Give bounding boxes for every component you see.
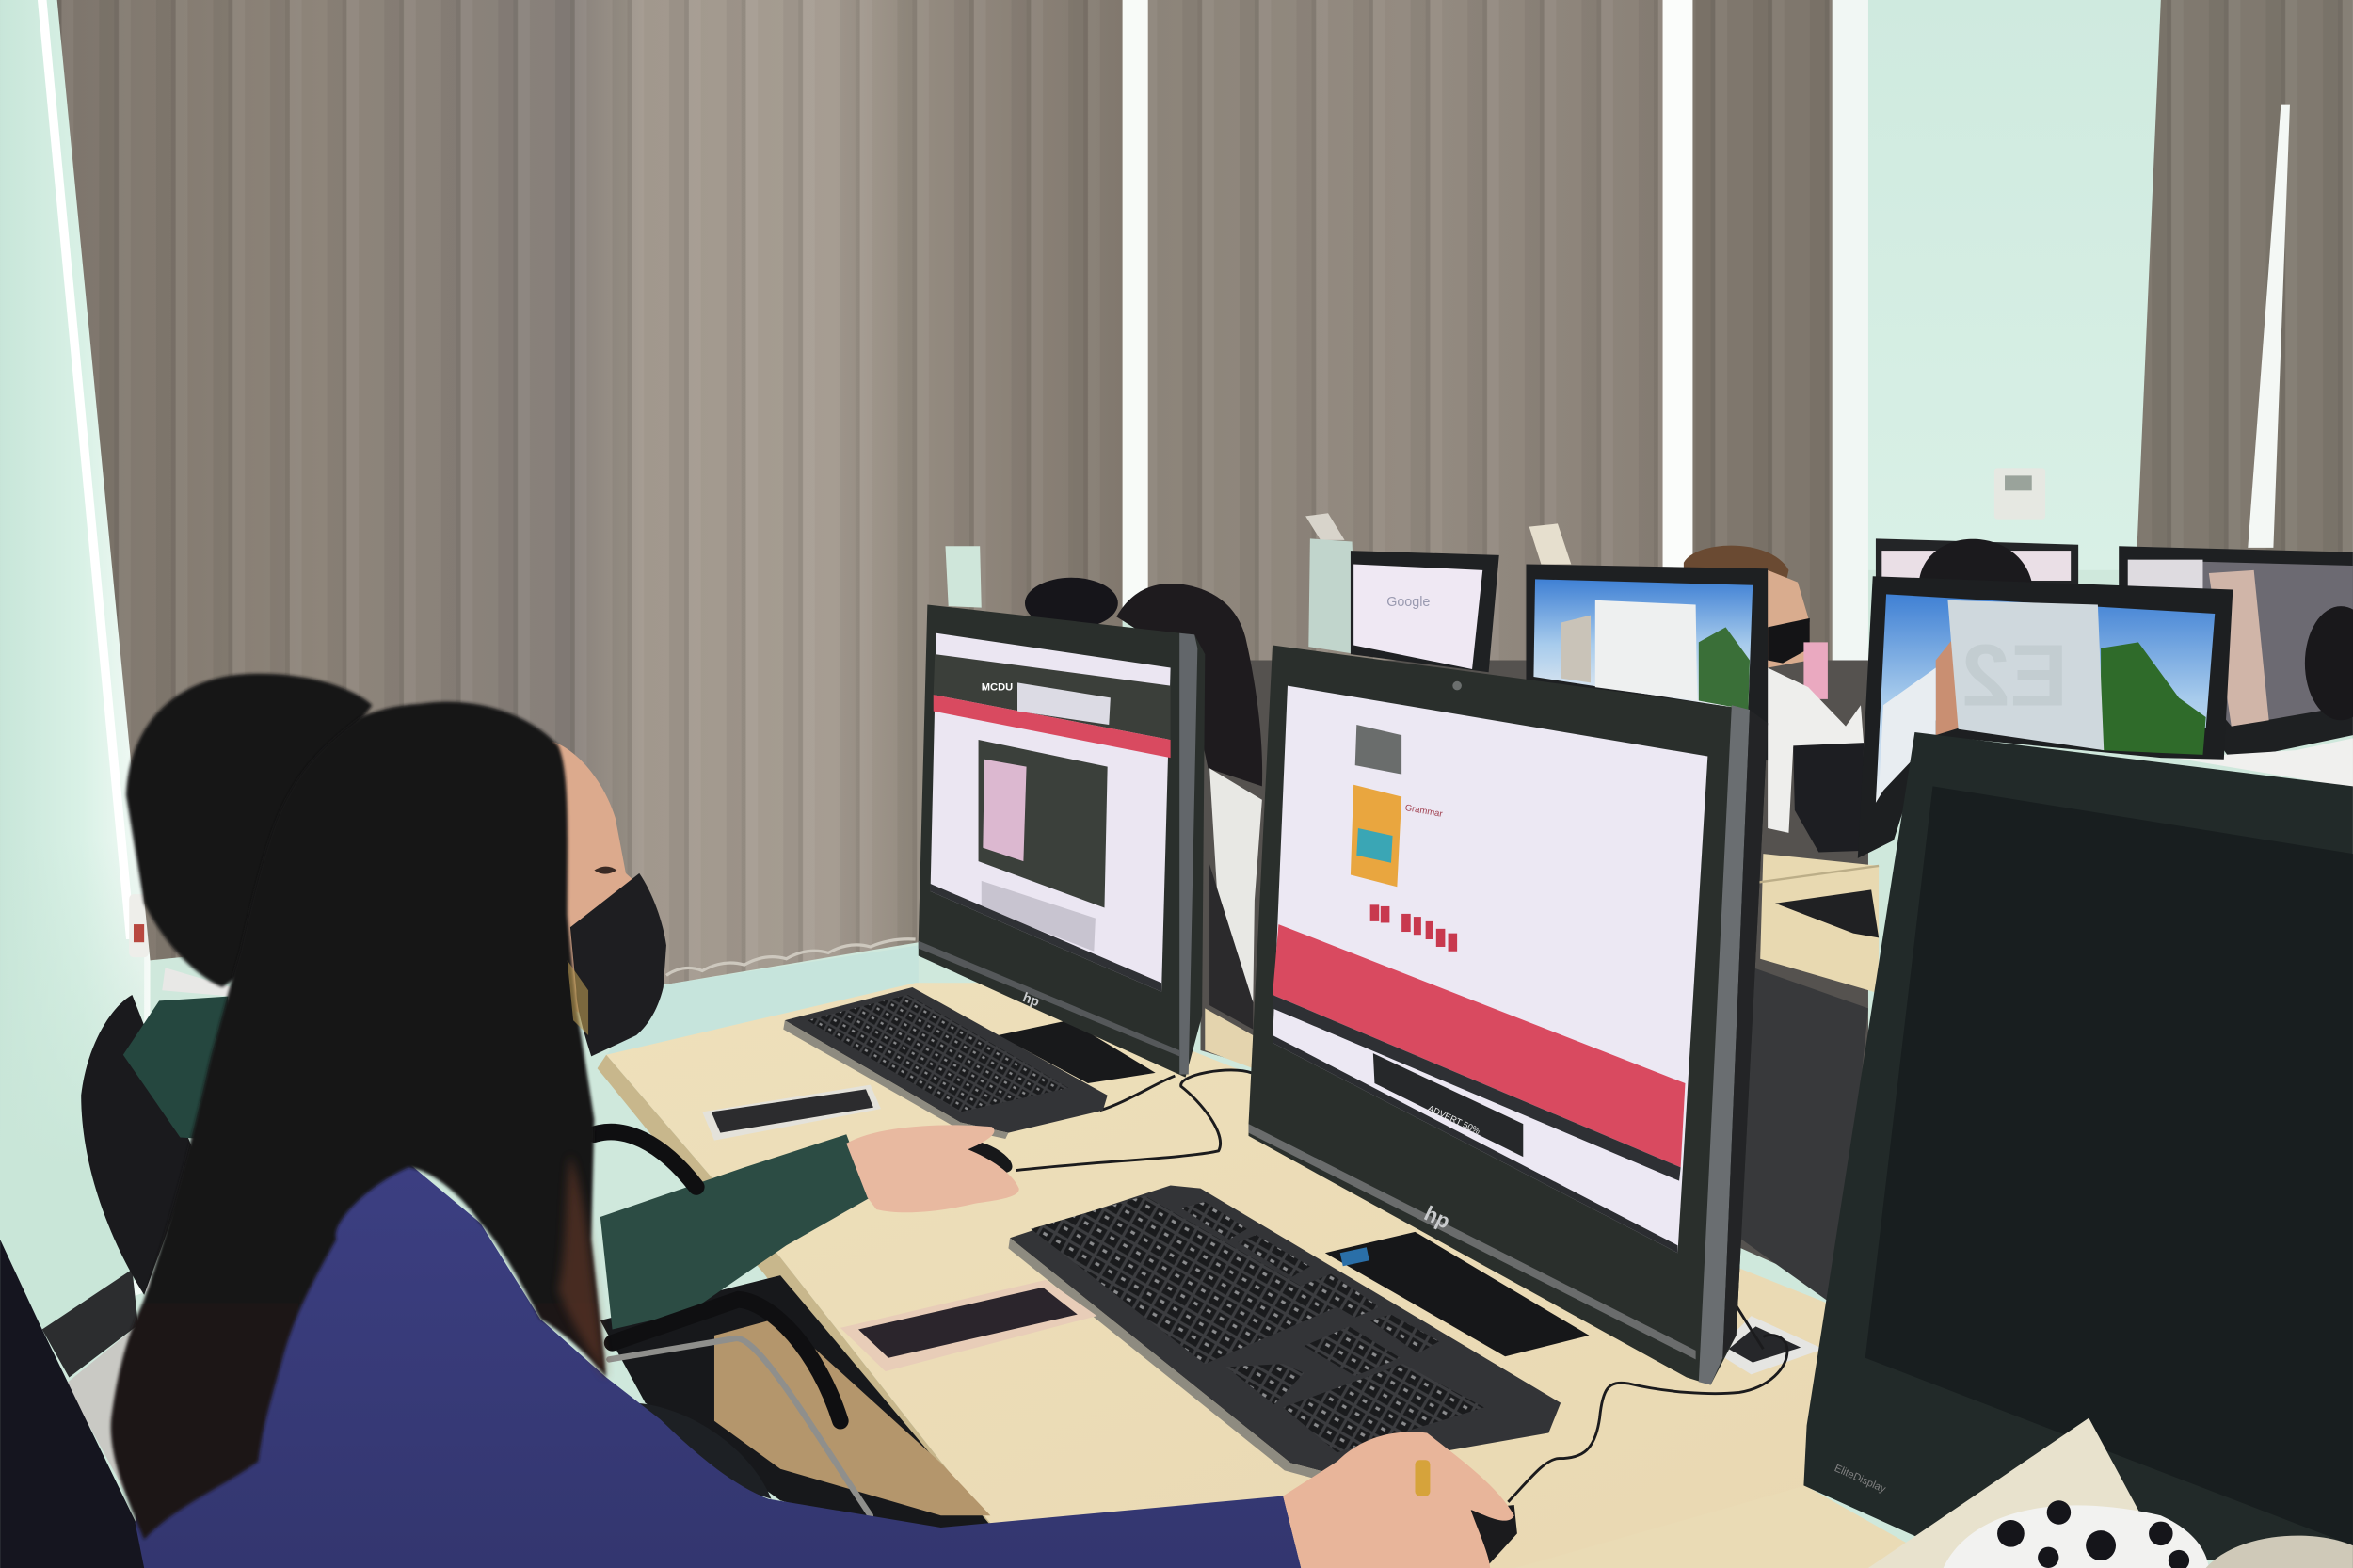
person at far right edge xyxy=(2174,606,2353,788)
note paper on middle monitor xyxy=(945,546,982,608)
back monitor with desktop xyxy=(1526,564,1768,760)
back student, far hair xyxy=(1025,578,1118,629)
large monitor xyxy=(1249,646,1768,1385)
cables xyxy=(1016,1070,1787,1502)
back monitor with search page: Google xyxy=(1386,595,1430,610)
large monitor screen: Grammar xyxy=(1404,803,1444,820)
rear student green hoodie xyxy=(123,997,228,1141)
large keyboard xyxy=(1008,1185,1561,1480)
front chair xyxy=(0,1240,151,1568)
middle monitor stand xyxy=(998,1020,1156,1083)
back monitor small top xyxy=(1876,538,2078,588)
note paper on top of back monitor xyxy=(1305,513,1345,540)
legs of rear student xyxy=(714,1318,990,1515)
large monitor screen xyxy=(1273,686,1707,1253)
paper sign E2 xyxy=(1947,600,2104,750)
under desk dark area xyxy=(600,1275,1027,1568)
back student head behind top monitor xyxy=(1919,539,2032,583)
large monitor: hp xyxy=(1420,1201,1454,1234)
near desk right xyxy=(1515,1485,1951,1568)
wall strip below blinds xyxy=(606,945,919,1055)
front student hand on mouse xyxy=(1283,1432,1517,1568)
front student long hair xyxy=(111,702,606,1540)
middle monitor xyxy=(919,604,1205,1078)
paper sign E2: E2 xyxy=(1961,626,2068,724)
vertical blinds centre xyxy=(1148,0,1663,675)
chair seat xyxy=(636,1403,772,1499)
back student beside monitor xyxy=(1116,584,1262,1068)
brown hair tips xyxy=(558,1156,606,1378)
back monitor far right xyxy=(2119,546,2353,760)
front student sweater xyxy=(136,1159,1301,1568)
fabric bag in bottom corner xyxy=(1868,1418,2353,1568)
rear student hair xyxy=(126,674,372,987)
middle monitor: hp xyxy=(1020,990,1042,1010)
rear student sleeve xyxy=(600,1134,871,1330)
desk socket xyxy=(1715,1316,1823,1374)
vertical blinds right of window xyxy=(1692,0,1833,675)
phone on large desk xyxy=(840,1280,1097,1371)
main desk xyxy=(606,983,1830,1568)
face mask xyxy=(570,873,666,1056)
right foreground monitor: EliteDisplay xyxy=(1833,1463,1888,1496)
back student right with mask xyxy=(1684,546,1864,853)
back monitor with tree wallpaper xyxy=(1858,576,2233,858)
vertical blinds left xyxy=(57,0,1123,984)
middle keyboard xyxy=(783,987,1108,1139)
front student face xyxy=(552,742,639,1020)
white collar xyxy=(376,1101,565,1275)
middle monitor screen xyxy=(931,633,1171,992)
middle monitor screen: MCDU xyxy=(982,681,1013,693)
chair armrests xyxy=(594,1132,871,1515)
left chair xyxy=(81,995,195,1295)
rear student hand on mouse xyxy=(846,1125,1019,1212)
large monitor stand xyxy=(1325,1232,1589,1356)
vertical blinds far right xyxy=(2137,0,2353,552)
note paper on back monitor xyxy=(1308,538,1356,654)
back row floor shadow xyxy=(1201,660,1868,1305)
rear student collar xyxy=(162,968,232,997)
large monitor screen: ADVERT 50% xyxy=(1426,1104,1482,1137)
second note paper xyxy=(1529,523,1571,564)
back monitor with search page xyxy=(1351,551,1499,672)
phone on middle desk xyxy=(702,1085,881,1141)
left wall with window light xyxy=(0,0,156,1545)
far desk xyxy=(1733,854,1879,1308)
hair highlight by the cheek xyxy=(568,960,588,1035)
thermostat on wall xyxy=(1994,468,2045,520)
desk edge shade xyxy=(598,1055,1027,1568)
right foreground monitor xyxy=(1803,732,2353,1568)
eye xyxy=(594,867,616,874)
